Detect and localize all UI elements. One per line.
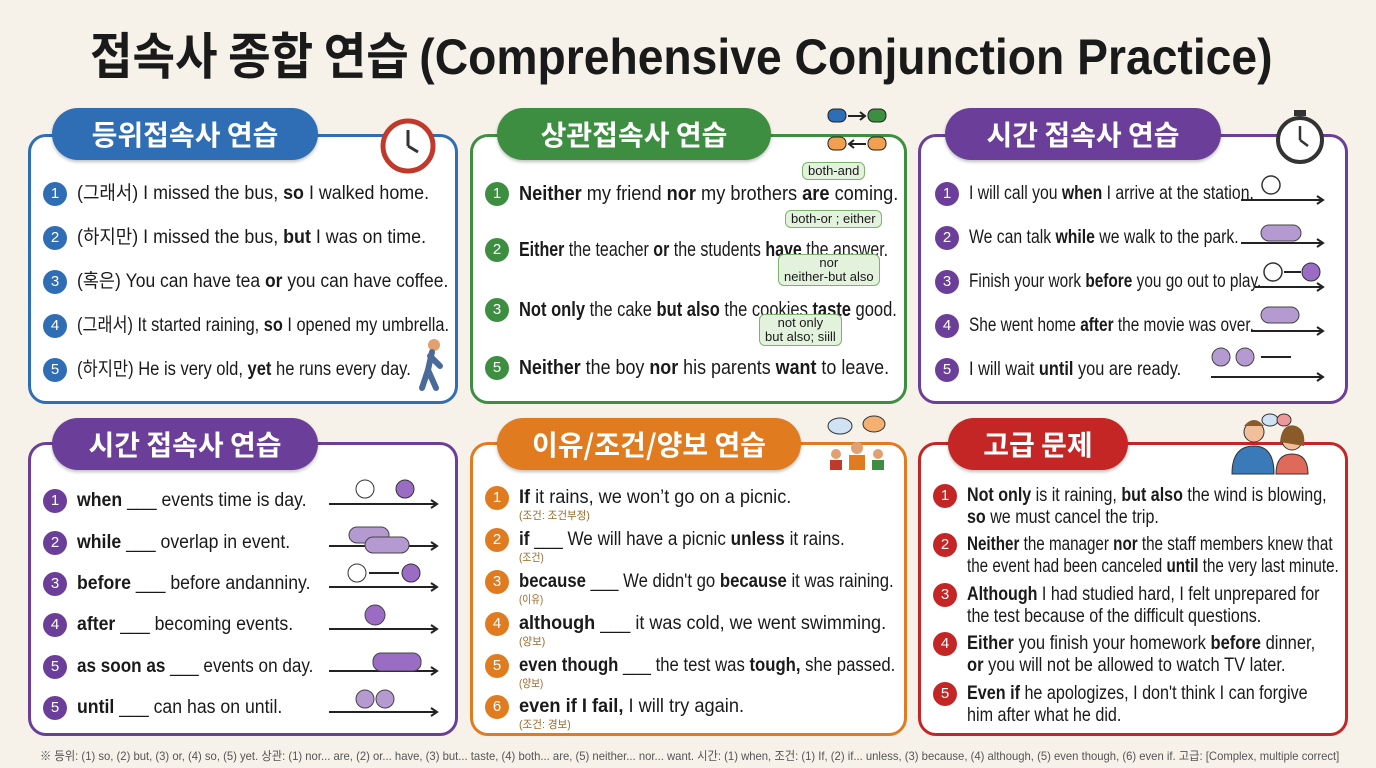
item list reason: because ___ We didn't go because it was raining. — [519, 571, 894, 592]
item list coordinating: 5 — [51, 361, 59, 378]
icon: walker — [419, 339, 443, 391]
item list reason: if ___ We will have a picnic unless it rains. — [519, 529, 845, 550]
item list coordinating: 3 — [51, 273, 59, 290]
item list time: I will call you when I arrive at the station. — [969, 183, 1254, 204]
item list time bottom: when ___ events time is day. — [77, 490, 306, 511]
icon: stopwatch — [1276, 110, 1324, 164]
item list reason: (양보) — [519, 636, 545, 648]
item list advanced: the event had been canceled until the very last minute. — [967, 556, 1339, 577]
item list reason — [485, 486, 895, 731]
heading: time bottom — [52, 418, 318, 470]
tags: both-and — [808, 163, 859, 178]
item list correlative: Not only the cake but also the cookies taste good. — [519, 299, 897, 321]
item list time: 3 — [943, 273, 951, 290]
item list reason: 4 — [493, 615, 501, 632]
item list advanced — [933, 484, 1339, 726]
heading: reason: 이유/조건/양보 연습 — [532, 424, 766, 464]
item list reason: although ___ it was cold, we went swimming. — [519, 613, 886, 634]
item list reason: (조건: 조건부정) — [519, 510, 590, 522]
panel: correlative — [470, 134, 907, 404]
item list time bottom: 4 — [51, 616, 59, 633]
item list advanced: 5 — [941, 685, 949, 702]
item list time: I will wait until you are ready. — [969, 359, 1181, 380]
tags: neither-but also — [784, 269, 874, 284]
item list coordinating: 4 — [51, 317, 59, 334]
panel: advanced — [918, 442, 1348, 736]
panel: time (top) — [918, 134, 1348, 404]
item list time — [935, 182, 1261, 382]
timelines bottom — [329, 480, 439, 717]
item list reason: 3 — [493, 573, 501, 590]
item list reason: 5 — [493, 657, 501, 674]
heading: advanced — [948, 418, 1128, 470]
item list reason: (조건: 경보) — [519, 719, 571, 731]
panel: coordinating — [28, 134, 458, 404]
item list time bottom: 5 — [51, 658, 59, 675]
panel: time (bottom) — [28, 442, 458, 736]
heading: time bottom: 시간 접속사 연습 — [88, 424, 282, 464]
item list reason: If it rains, we won’t go on a picnic. — [519, 487, 791, 508]
item list advanced: 3 — [941, 586, 949, 603]
icon: thinking people — [1232, 414, 1308, 474]
item list coordinating: (하지만) I missed the bus, but I was on time. — [77, 227, 426, 248]
footer note: ※ 등위: (1) so, (2) but, (3) or, (4) so, (5) yet. 상관: (1) nor... are, (2) or... have, (3) but... taste, (4) both... are, (5) neither... nor... want. 시간: (1) when, 조건: (1) If, (2) if... unless, (3) because, (4) although, (5) even though, (6) even if. 고급: [Complex, multiple correct] — [40, 749, 1339, 763]
item list time: 5 — [943, 361, 951, 378]
item list advanced: Not only is it raining, but also the wind is blowing, — [967, 485, 1327, 506]
item list coordinating: 1 — [51, 185, 59, 202]
item list advanced: 4 — [941, 635, 949, 652]
icon: clock — [380, 118, 436, 174]
heading: advanced: 고급 문제 — [983, 424, 1093, 464]
item list time bottom: as soon as ___ events on day. — [77, 656, 313, 677]
item list time: We can talk while we walk to the park. — [969, 227, 1239, 248]
heading: reason — [497, 418, 801, 470]
tags: nor — [819, 255, 838, 270]
item list advanced: 2 — [941, 536, 949, 553]
item list advanced: 1 — [941, 487, 949, 504]
item list time: 4 — [943, 317, 951, 334]
heading: time: 시간 접속사 연습 — [986, 114, 1180, 154]
item list time bottom — [43, 489, 313, 720]
item list advanced: the test because of the difficult questions. — [967, 606, 1261, 627]
item list reason: (이유) — [519, 594, 543, 606]
item list correlative — [485, 182, 898, 380]
item list correlative: 5 — [493, 359, 501, 376]
item list time: She went home after the movie was over. — [969, 315, 1254, 336]
tags: both-or ; either — [791, 211, 876, 226]
item list coordinating: (그래서) I missed the bus, so I walked home. — [77, 183, 429, 204]
panel: reason/condition — [470, 442, 907, 736]
item list advanced: Either you finish your homework before dinner, — [967, 633, 1315, 654]
item list time bottom: after ___ becoming events. — [77, 614, 293, 635]
item list reason: 1 — [493, 489, 501, 506]
item list advanced: Neither the manager nor the staff members knew that — [967, 534, 1333, 555]
item list correlative: 2 — [493, 241, 501, 258]
item list advanced: or you will not be allowed to watch TV later. — [967, 655, 1286, 676]
item list correlative: Either the teacher or the students have the answer. — [519, 239, 888, 261]
item list correlative: 1 — [493, 185, 501, 202]
item list reason: even though ___ the test was tough, she passed. — [519, 655, 895, 676]
item list coordinating: (혹은) You can have tea or you can have coffee. — [77, 271, 448, 292]
item list advanced: Although I had studied hard, I felt unprepared for — [967, 584, 1319, 605]
item list coordinating — [43, 182, 449, 382]
icon: people — [828, 416, 886, 470]
item list correlative: Neither the boy nor his parents want to leave. — [519, 357, 889, 379]
item list time: 2 — [943, 229, 951, 246]
icon: arrows — [828, 108, 886, 150]
item list reason: (조건) — [519, 552, 544, 564]
tags: but also; siill — [765, 329, 836, 344]
item list coordinating: 2 — [51, 229, 59, 246]
heading: time — [945, 108, 1221, 160]
title: 접속사 종합 연습 (Comprehensive Conjunction Practice) — [90, 17, 1272, 89]
item list reason: 2 — [493, 531, 501, 548]
timelines — [1211, 175, 1325, 382]
item list coordinating: (하지만) He is very old, yet he runs every day. — [77, 359, 411, 380]
heading: coordinating: 등위접속사 연습 — [92, 114, 278, 154]
item list coordinating: (그래서) It started raining, so I opened my umbrella. — [77, 315, 449, 336]
item list time bottom: until ___ can has on until. — [77, 697, 282, 718]
item list advanced: Even if he apologizes, I don't think I can forgive — [967, 683, 1308, 704]
item list time bottom: while ___ overlap in event. — [77, 532, 290, 553]
item list correlative: 3 — [493, 301, 501, 318]
item list time bottom: before ___ before andanniny. — [77, 573, 310, 594]
item list advanced: so we must cancel the trip. — [967, 507, 1159, 528]
heading: coordinating — [52, 108, 318, 160]
heading: correlative — [497, 108, 771, 160]
item list time: Finish your work before you go out to play. — [969, 271, 1261, 292]
item list reason: even if I fail, I will try again. — [519, 696, 744, 717]
item list advanced: him after what he did. — [967, 705, 1121, 726]
tags — [759, 162, 882, 346]
item list time bottom: 1 — [51, 492, 59, 509]
item list time: 1 — [943, 185, 951, 202]
tags: not only — [778, 315, 823, 330]
item list time bottom: 5 — [51, 699, 59, 716]
heading: correlative: 상관접속사 연습 — [541, 114, 727, 154]
item list reason: (양보) — [519, 678, 543, 690]
item list reason: 6 — [493, 698, 501, 715]
item list time bottom: 3 — [51, 575, 59, 592]
item list correlative: Neither my friend nor my brothers are coming. — [519, 183, 898, 205]
item list time bottom: 2 — [51, 534, 59, 551]
